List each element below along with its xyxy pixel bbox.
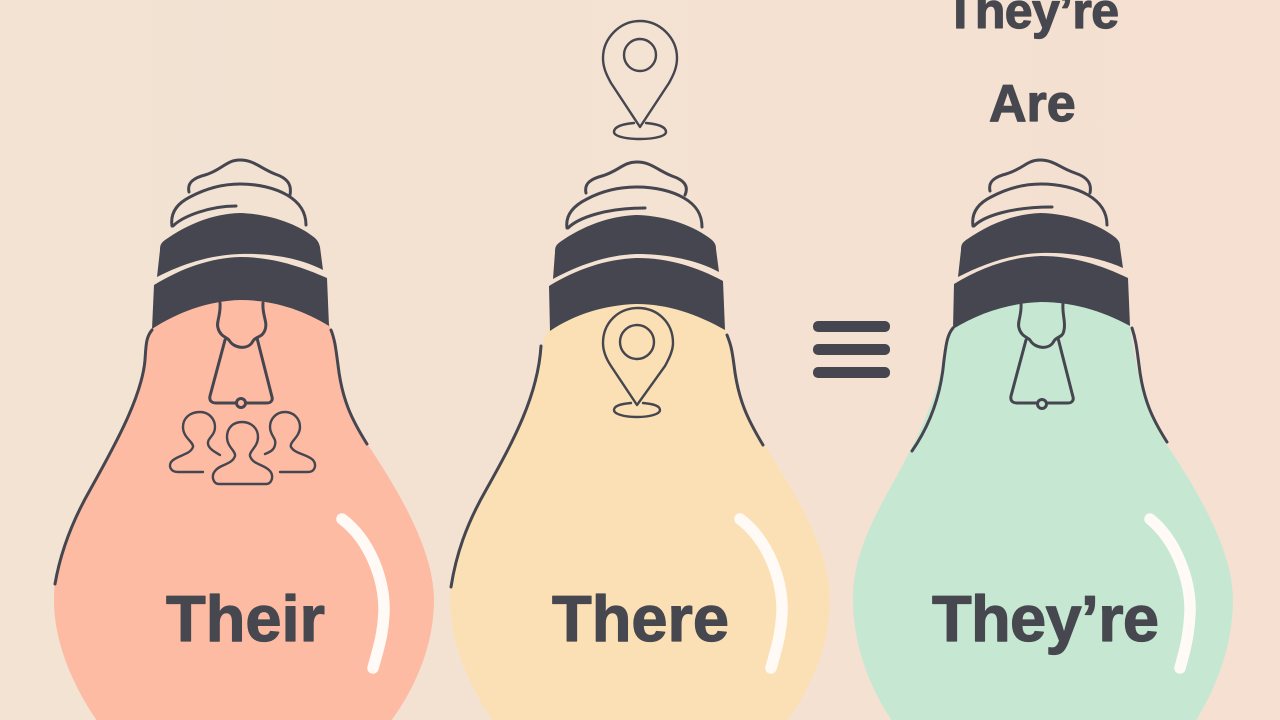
panel: They're bulb (853, 160, 1233, 720)
heading text: Are: Are (989, 75, 1076, 133)
highlight (740, 519, 782, 668)
icon: map pin inside bulb (603, 308, 673, 417)
highlight (1150, 519, 1190, 668)
icon: group of people (170, 412, 315, 484)
icon: map pin above bulb (603, 21, 677, 139)
screw thread (973, 160, 1107, 226)
label: There: There (552, 582, 729, 655)
screw thread (567, 162, 702, 228)
highlight (342, 519, 384, 668)
screw thread (172, 160, 306, 226)
metal cap (152, 213, 329, 329)
panel: Their bulb (54, 160, 434, 720)
metal cap (549, 215, 725, 331)
label: They're: They’re (932, 582, 1159, 655)
filament (210, 303, 272, 408)
panel: There bulb (450, 162, 830, 720)
icon: three bars (813, 321, 890, 378)
filament (1011, 303, 1073, 408)
label: Their: Their (166, 582, 325, 655)
bulb outline (55, 330, 367, 584)
bulb outline (451, 335, 763, 587)
bulb outline (912, 328, 1167, 451)
metal cap (953, 213, 1130, 329)
bulb glass: green (853, 300, 1233, 720)
bulb glass: yellow (450, 300, 830, 720)
bulb glass: coral (54, 300, 434, 720)
